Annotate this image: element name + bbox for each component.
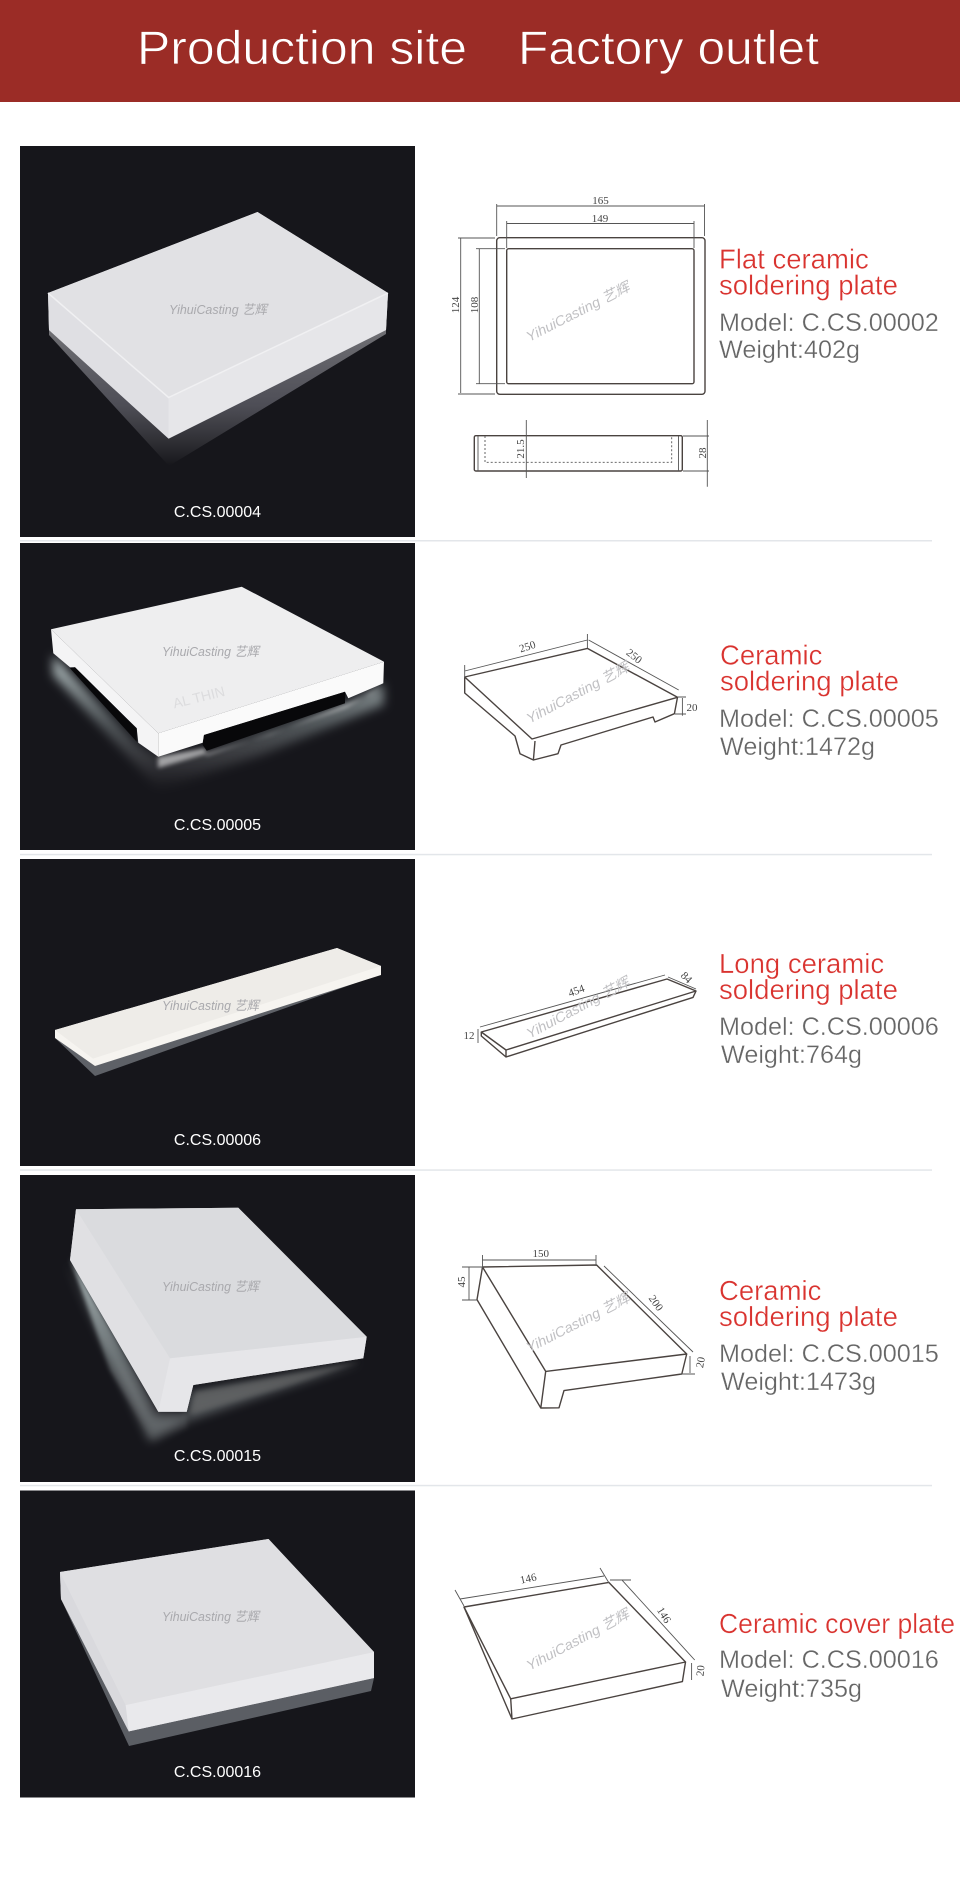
photo: step plate: C.CS.00015 [174, 1448, 261, 1465]
panel: product C.CS.00015 [20, 1175, 939, 1482]
photo: cover plate: YihuiCasting 艺辉 [162, 1609, 261, 1624]
product text [719, 244, 939, 364]
banner title: Factory outlet [518, 21, 819, 74]
drawing: cover plate dimensions: 20 [695, 1664, 708, 1677]
photo: long plate: C.CS.00006 [174, 1132, 261, 1149]
drawing: long plate dimensions: YihuiCasting 艺辉 [524, 973, 634, 1041]
product text: soldering plate [720, 666, 899, 696]
drawing: step plate dimensions: 20 [694, 1356, 708, 1369]
drawing: flat plate dimensions: 124 [450, 296, 462, 313]
product text: Weight:402g [719, 336, 860, 364]
product text: soldering plate [719, 1301, 898, 1332]
product text: soldering plate [719, 974, 898, 1005]
photo: plate with notches: YihuiCasting 艺辉 [162, 644, 261, 659]
product text: Long ceramic [719, 948, 884, 979]
product text [719, 1608, 955, 1703]
product text: soldering plate [719, 270, 898, 300]
photo: long plate [20, 859, 415, 1166]
photo: flat plate: C.CS.00004 [174, 504, 261, 521]
photo: step plate [20, 1175, 415, 1482]
product text: Model: C.CS.00016 [719, 1646, 939, 1674]
panel: product C.CS.00002 [20, 146, 939, 537]
product text: Flat ceramic [719, 244, 869, 274]
photo: long plate: YihuiCasting 艺辉 [162, 998, 261, 1013]
panel: product C.CS.00005 [20, 543, 939, 850]
drawing: long plate dimensions: 454 [567, 983, 587, 1000]
photo: plate with notches [20, 543, 415, 850]
drawing: notched plate dimensions: 250 [624, 647, 644, 667]
product text: Model: C.CS.00002 [719, 309, 939, 337]
photo: plate with notches: AL THIN [171, 683, 226, 711]
drawing: flat plate dimensions: 165 [592, 195, 609, 207]
product text: Model: C.CS.00005 [719, 705, 939, 733]
product text: Ceramic [719, 1275, 822, 1306]
product text: Weight:1473g [721, 1368, 876, 1396]
drawing: step plate dimensions [456, 1248, 708, 1408]
drawing: cover plate dimensions [455, 1568, 708, 1719]
drawing: flat plate dimensions: 149 [592, 213, 609, 225]
drawing: flat plate dimensions: 28 [697, 447, 709, 458]
drawing: flat plate dimensions [450, 195, 709, 487]
photo: step plate: YihuiCasting 艺辉 [162, 1279, 261, 1294]
photo: plate with notches: C.CS.00005 [174, 817, 261, 834]
drawing: long plate dimensions [464, 970, 696, 1057]
product text: Model: C.CS.00006 [719, 1013, 939, 1041]
product text: Model: C.CS.00015 [719, 1340, 939, 1368]
product text: Weight:735g [721, 1675, 862, 1703]
product text: Ceramic [720, 640, 823, 670]
drawing: flat plate dimensions: 21.5 [515, 439, 527, 459]
panel: product C.CS.00006 [20, 859, 939, 1166]
drawing: cover plate dimensions: 146 [519, 1571, 538, 1587]
drawing: step plate dimensions: YihuiCasting 艺辉 [523, 1289, 634, 1356]
product text [719, 1275, 939, 1396]
drawing: notched plate dimensions: YihuiCasting 艺辉 [524, 658, 634, 726]
product text: Weight:1472g [720, 733, 875, 761]
drawing: step plate dimensions: 150 [533, 1248, 550, 1260]
drawing: long plate dimensions: 84 [678, 970, 695, 986]
photo: cover plate: C.CS.00016 [174, 1764, 261, 1781]
drawing: step plate dimensions: 200 [646, 1293, 665, 1314]
drawing: notched plate dimensions [465, 634, 698, 760]
photo: flat plate [20, 146, 415, 537]
drawing: cover plate dimensions: 146 [654, 1605, 673, 1626]
drawing: step plate dimensions: 45 [456, 1276, 468, 1288]
panel: product C.CS.00016 [20, 1490, 955, 1798]
banner title [137, 21, 819, 74]
drawing: notched plate dimensions: 250 [518, 639, 538, 655]
product text: Ceramic cover plate [719, 1608, 955, 1639]
drawing: long plate dimensions: 12 [464, 1030, 474, 1042]
product text [719, 640, 939, 761]
drawing: flat plate dimensions: YihuiCasting 艺辉 [523, 278, 634, 345]
product text [719, 948, 939, 1069]
drawing: flat plate dimensions: 108 [469, 296, 481, 313]
banner title: Production site [137, 21, 467, 74]
photo: flat plate: YihuiCasting 艺辉 [169, 302, 269, 317]
photo: cover plate [20, 1490, 415, 1798]
drawing: notched plate dimensions: 20 [686, 702, 698, 714]
banner [0, 0, 960, 102]
product text: Weight:764g [721, 1041, 862, 1069]
drawing: cover plate dimensions: YihuiCasting 艺辉 [524, 1605, 634, 1673]
